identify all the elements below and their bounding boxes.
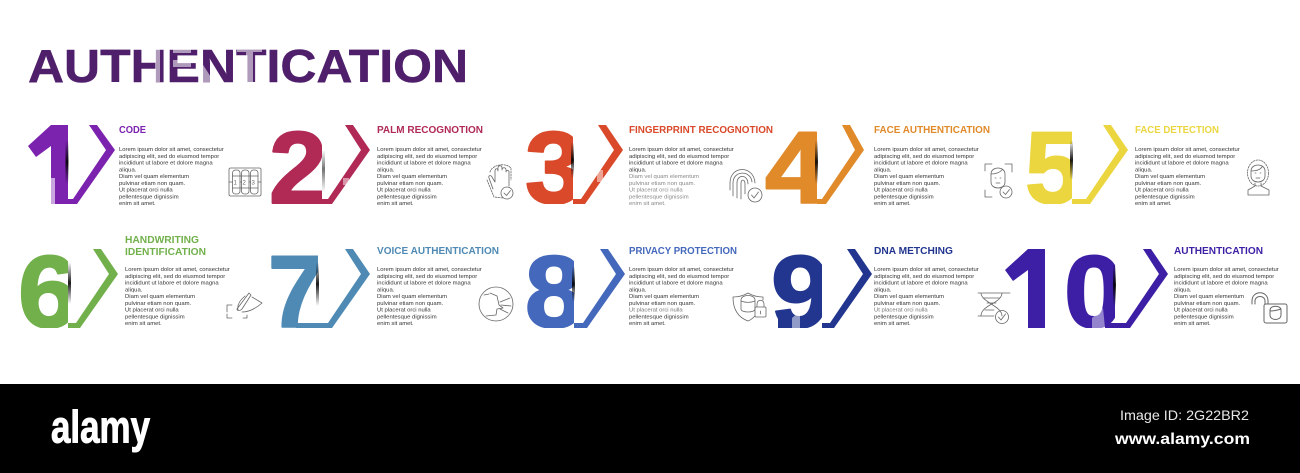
body text 1: aliqua.	[119, 167, 137, 173]
number 7: 7	[268, 235, 324, 349]
number 9	[774, 254, 822, 328]
body text 10: Diam vel quam elementum	[1174, 294, 1244, 300]
body text 7: pellentesque dignissim	[377, 314, 437, 320]
body text 10: Lorem ipsum dolor sit amet, consectetur	[1174, 267, 1279, 273]
body text 4: incididunt ut labore et dolore magna	[874, 160, 968, 166]
body text 9: Lorem ipsum dolor sit amet, consectetur	[874, 267, 979, 273]
body text 7: Diam vel quam elementum	[377, 294, 447, 300]
heading: face detection: FACE DETECTION	[1135, 125, 1219, 136]
icon: palm	[487, 165, 513, 199]
body text 6: Lorem ipsum dolor sit amet, consectetur	[125, 267, 230, 273]
chevron 9	[822, 249, 872, 328]
heading: code: CODE	[119, 125, 146, 136]
body text 9: aliqua.	[874, 287, 892, 293]
number 9: 9	[771, 235, 831, 349]
icon: face scan	[985, 164, 1012, 198]
panel: 5 face detection	[1027, 125, 1270, 205]
body text 4: Diam vel quam elementum	[874, 174, 944, 180]
number 4	[766, 132, 818, 204]
body text 1: enim sit amet.	[119, 201, 156, 207]
body text 8: aliqua.	[629, 287, 647, 293]
body text 6: enim sit amet.	[125, 321, 162, 327]
body text 9: incididunt ut labore et dolore magna	[874, 280, 968, 286]
body text 3: adipiscing elit, sed do eiusmod tempor	[629, 154, 729, 160]
body text 7: enim sit amet.	[377, 321, 414, 327]
number 8: 8	[525, 235, 583, 349]
body text 7: aliqua.	[377, 287, 395, 293]
panel: 9 dna metching	[774, 247, 1010, 328]
title: AUTHENTICATION	[28, 40, 468, 92]
icon: fingerprint	[730, 170, 762, 202]
panel: 3 fingerprint recognotion	[526, 125, 772, 205]
number 3	[526, 130, 574, 204]
panel: 7 voice authentication	[271, 247, 514, 328]
body text 5: pulvinar etiam non quam.	[1135, 181, 1202, 187]
body text 9: pulvinar etiam non quam.	[874, 301, 941, 307]
image id: Image ID: 2G22BR2	[1120, 407, 1249, 423]
body text 8: Lorem ipsum dolor sit amet, consectetur	[629, 267, 734, 273]
number 1	[28, 125, 68, 204]
body text 1: incididunt ut labore et dolore magna	[119, 160, 213, 166]
body text 7: Ut placerat orci nulla	[377, 308, 431, 314]
number 8	[527, 254, 575, 328]
body text 4: pellentesque dignissim	[874, 194, 934, 200]
body text 6: Ut placerat orci nulla	[125, 308, 179, 314]
body text 6: adipiscing elit, sed do eiusmod tempor	[125, 274, 225, 280]
icon: face detection	[1248, 160, 1269, 195]
body text 10: aliqua.	[1174, 287, 1192, 293]
number 6: 6	[18, 235, 78, 349]
body text 4: Ut placerat orci nulla	[874, 188, 928, 194]
number 2	[272, 130, 325, 204]
body text 10: adipiscing elit, sed do eiusmod tempor	[1174, 274, 1274, 280]
body text 8: enim sit amet.	[629, 321, 666, 327]
body text 10: incididunt ut labore et dolore magna	[1174, 280, 1268, 286]
chevron 10	[1105, 249, 1168, 328]
number 10: 0	[1064, 235, 1124, 349]
panel: 1 code	[28, 125, 262, 205]
panel: 4 face authentication	[766, 125, 1012, 205]
body text 3: Lorem ipsum dolor sit amet, consectetur	[629, 147, 734, 153]
body text 3: aliqua.	[629, 167, 647, 173]
body text 8: pellentesque dignissim	[629, 314, 689, 320]
body text 7: pulvinar etiam non quam.	[377, 301, 444, 307]
body text 9: adipiscing elit, sed do eiusmod tempor	[874, 274, 974, 280]
panel: 6 handwriting identification	[20, 236, 262, 328]
body text 5: Lorem ipsum dolor sit amet, consectetur	[1135, 147, 1240, 153]
website: www.alamy.com	[1114, 431, 1250, 448]
icon: open lock	[1252, 293, 1287, 323]
body text 2: pulvinar etiam non quam.	[377, 181, 444, 187]
number 7	[271, 256, 319, 328]
chevron 6	[68, 249, 118, 328]
heading: palm recognotion: PALM RECOGNOTION	[377, 125, 483, 136]
body text 4: Lorem ipsum dolor sit amet, consectetur	[874, 147, 979, 153]
body text 4: pulvinar etiam non quam.	[874, 181, 941, 187]
body text 5: enim sit amet.	[1135, 201, 1172, 207]
body text 7: incididunt ut labore et dolore magna	[377, 280, 471, 286]
footer bar	[0, 384, 1300, 473]
icon: voice	[479, 287, 513, 321]
body text 3: Diam vel quam elementum	[629, 174, 699, 180]
body text 1: Diam vel quam elementum	[119, 174, 189, 180]
body text 1: pulvinar etiam non quam.	[119, 181, 186, 187]
number 10: 1	[1005, 235, 1062, 349]
heading: handwriting identification	[125, 235, 206, 258]
chevron 4	[817, 125, 864, 204]
icon: keypad: 1	[234, 180, 238, 186]
body text 6: aliqua.	[125, 287, 143, 293]
body text 2: pellentesque dignissim	[377, 194, 437, 200]
icon: dna	[978, 293, 1010, 324]
body text 9: pellentesque dignissim	[874, 314, 934, 320]
number 1: 1	[28, 111, 85, 225]
body text 2: Ut placerat orci nulla	[377, 188, 431, 194]
heading: face authentication: FACE AUTHENTICATION	[874, 125, 990, 136]
body text 8: Diam vel quam elementum	[629, 294, 699, 300]
body text 2: aliqua.	[377, 167, 395, 173]
body text 2: enim sit amet.	[377, 201, 414, 207]
heading: handwriting identification: HANDWRITING	[125, 235, 199, 246]
body text 10: pulvinar etiam non quam.	[1174, 301, 1241, 307]
body text 8: incididunt ut labore et dolore magna	[629, 280, 723, 286]
heading: voice authentication: VOICE AUTHENTICATION	[377, 246, 499, 257]
body text 6: Diam vel quam elementum	[125, 294, 195, 300]
heading: handwriting identification: IDENTIFICATION	[125, 247, 206, 258]
heading: fingerprint recognotion: FINGERPRINT RECOGNOTION	[629, 125, 773, 136]
body text 5: Diam vel quam elementum	[1135, 174, 1205, 180]
body text 7: adipiscing elit, sed do eiusmod tempor	[377, 274, 477, 280]
body text 9: Diam vel quam elementum	[874, 294, 944, 300]
number 4: 4	[765, 111, 827, 225]
icon: handwriting	[227, 293, 262, 318]
chevron 1	[68, 125, 115, 204]
body text 6: incididunt ut labore et dolore magna	[125, 280, 219, 286]
body text 9: Ut placerat orci nulla	[874, 308, 928, 314]
body text 8: Ut placerat orci nulla	[629, 308, 683, 314]
number 6	[20, 254, 71, 328]
body text 2: Lorem ipsum dolor sit amet, consectetur	[377, 147, 482, 153]
body text 8: adipiscing elit, sed do eiusmod tempor	[629, 274, 729, 280]
body text 10: pellentesque dignissim	[1174, 314, 1234, 320]
chevron 8	[574, 249, 625, 328]
chevron 3	[573, 125, 623, 204]
body text 6: pellentesque dignissim	[125, 314, 185, 320]
chevron 2	[322, 125, 370, 204]
icon: shield lock	[733, 293, 766, 321]
body text 1: adipiscing elit, sed do eiusmod tempor	[119, 154, 219, 160]
body text 3: pellentesque dignissim	[629, 194, 689, 200]
panel: 2 palm recognotion	[272, 125, 514, 205]
body text 1: Lorem ipsum dolor sit amet, consectetur	[119, 147, 224, 153]
body text 3: Ut placerat orci nulla	[629, 188, 683, 194]
body text 3: pulvinar etiam non quam.	[629, 181, 696, 187]
body text 10: Ut placerat orci nulla	[1174, 308, 1228, 314]
body text 5: aliqua.	[1135, 167, 1153, 173]
body text 1: Ut placerat orci nulla	[119, 188, 173, 194]
body text 4: aliqua.	[874, 167, 892, 173]
body text 2: incididunt ut labore et dolore magna	[377, 160, 471, 166]
heading: authentication: AUTHENTICATION	[1174, 246, 1263, 257]
panel: 8 privacy protection	[527, 247, 766, 328]
body text 10: enim sit amet.	[1174, 321, 1211, 327]
number 3: 3	[525, 111, 583, 225]
panel: 10 authentication	[1005, 247, 1288, 328]
body text 5: incididunt ut labore et dolore magna	[1135, 160, 1229, 166]
number 10	[1005, 249, 1116, 328]
body text 2: adipiscing elit, sed do eiusmod tempor	[377, 154, 477, 160]
icon: keypad: 3	[252, 180, 256, 186]
body text 9: enim sit amet.	[874, 321, 911, 327]
number 5: 5	[1025, 111, 1081, 225]
body text 1: pellentesque dignissim	[119, 194, 179, 200]
body text 6: pulvinar etiam non quam.	[125, 301, 192, 307]
body text 4: enim sit amet.	[874, 201, 911, 207]
body text 5: adipiscing elit, sed do eiusmod tempor	[1135, 154, 1235, 160]
chevron 7	[296, 249, 370, 328]
body text 5: pellentesque dignissim	[1135, 194, 1195, 200]
body text 2: Diam vel quam elementum	[377, 174, 447, 180]
body text 7: Lorem ipsum dolor sit amet, consectetur	[377, 267, 482, 273]
icon: keypad: 2	[242, 180, 246, 186]
alamy logo: alamy	[51, 402, 150, 452]
number 5	[1027, 132, 1073, 204]
body text 3: enim sit amet.	[629, 201, 666, 207]
body text 8: pulvinar etiam non quam.	[629, 301, 696, 307]
body text 4: adipiscing elit, sed do eiusmod tempor	[874, 154, 974, 160]
body text 5: Ut placerat orci nulla	[1135, 188, 1189, 194]
body text 3: incididunt ut labore et dolore magna	[629, 160, 723, 166]
heading: privacy protection: PRIVACY PROTECTION	[629, 246, 737, 257]
number 2: 2	[269, 111, 327, 225]
icon: keypad	[229, 168, 261, 196]
chevron 5	[1072, 125, 1128, 204]
heading: dna metching: DNA METCHING	[874, 246, 953, 257]
